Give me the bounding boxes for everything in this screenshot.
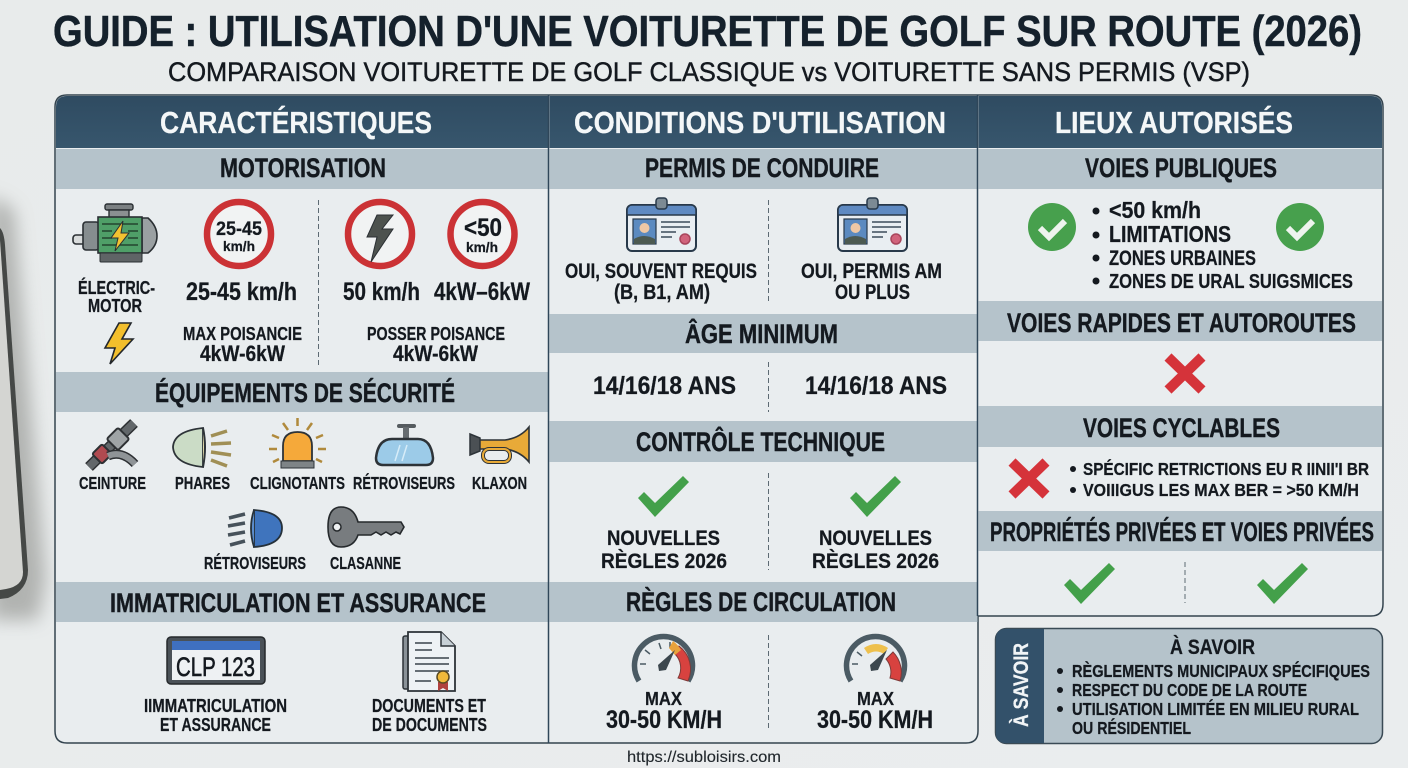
- icon: licence card right: [838, 198, 907, 251]
- text: permit right: OUI, PERMIS AM: [801, 260, 942, 283]
- icon: gauge left: [635, 636, 692, 681]
- section heading: voies publiques: [978, 149, 1382, 189]
- speed sign 25-45: 25-45: [216, 219, 262, 240]
- icon: licence card left: [627, 198, 696, 251]
- label: electric motor: ÉLECTRIC-: [78, 277, 155, 298]
- column header: [550, 96, 978, 148]
- values right: 50 km/h: [343, 278, 420, 306]
- text: nouvelles règles right: RÈGLES 2026: [812, 550, 939, 573]
- section heading: immatriculation: IMMATRICULATION ET ASSURANCE: [110, 588, 486, 618]
- section heading: voies publiques: VOIES PUBLIQUES: [1085, 153, 1277, 183]
- section heading: voies rapides: [978, 301, 1382, 341]
- icon: headlight: [173, 428, 231, 467]
- callout list: UTILISATION LIMITÉE EN MILIEU RURAL: [1072, 698, 1359, 719]
- text: permit left: [565, 260, 757, 304]
- callout list: [1057, 660, 1370, 738]
- icon: check private left: [1064, 563, 1115, 604]
- panel: lieux autorisés: [978, 96, 1382, 604]
- text: permit left: (B, B1, AM): [614, 281, 710, 304]
- section heading: motorisation: MOTORISATION: [220, 153, 386, 183]
- text: nouvelles règles right: [812, 527, 939, 573]
- section heading: âge minimum: ÂGE MINIMUM: [685, 318, 838, 349]
- column header: LIEUX AUTORISÉS: [1055, 105, 1293, 140]
- divider: [768, 473, 770, 570]
- icon: warning beacon: [269, 418, 326, 468]
- tablet at left edge: [0, 195, 46, 620]
- equipment labels row 1: RÉTROVISEURS: [353, 472, 455, 493]
- section heading: voies cyclables: VOIES CYCLABLES: [1083, 413, 1280, 443]
- section heading: âge minimum: [550, 314, 978, 353]
- sign: under 50: [450, 202, 514, 266]
- sign: electric bolt: [348, 202, 412, 266]
- panel: conditions d'utilisation: [550, 96, 978, 734]
- equipment labels row 2: RÉTROVISEURS: [204, 552, 306, 573]
- text: permit left: OUI, SOUVENT REQUIS: [565, 260, 757, 283]
- label: immatriculation: [144, 696, 287, 735]
- divider: [768, 200, 770, 302]
- power label right: 4kW-6kW: [393, 341, 478, 366]
- divider: [768, 635, 770, 728]
- label: documents: DE DOCUMENTS: [372, 715, 487, 735]
- power label right: POSSER POISANCE: [367, 324, 505, 344]
- age values: 14/16/18 ANS: [805, 372, 947, 400]
- label: immatriculation: IIMMATRICULATION: [144, 696, 287, 716]
- icon: blue headlight: [228, 510, 282, 547]
- text: nouvelles règles left: [601, 527, 727, 573]
- section heading: propriétés privées: [978, 511, 1382, 551]
- icon: seat belt: [89, 423, 135, 467]
- column divider: [548, 95, 978, 743]
- list: voies cyclables: VOIIIGUS LES MAX BER = >50 KM/H: [1083, 480, 1359, 500]
- equipment labels row 1: PHARES: [175, 473, 230, 493]
- list: voies publiques: <50 km/h: [1109, 197, 1201, 223]
- list: voies publiques: LIMITATIONS: [1109, 221, 1231, 247]
- section heading: équipements: ÉQUIPEMENTS DE SÉCURITÉ: [155, 377, 455, 408]
- list: voies publiques: [1092, 197, 1353, 293]
- label: immatriculation: ET ASSURANCE: [160, 715, 271, 735]
- label: max speed right: [817, 689, 933, 734]
- callout: à savoir: [996, 628, 1382, 744]
- label: max speed right: 30-50 KM/H: [817, 706, 933, 734]
- icon: check badge left: [1028, 203, 1076, 251]
- list: voies publiques: ZONES DE URAL SUIGSMICES: [1109, 271, 1353, 293]
- section heading: contrôle technique: [550, 421, 978, 462]
- icon: document: [403, 632, 455, 691]
- equipment labels row 2: [204, 552, 401, 573]
- equipment labels row 1: CLIGNOTANTS: [250, 473, 345, 493]
- text: nouvelles règles left: NOUVELLES: [607, 527, 720, 550]
- power label left: [183, 324, 302, 366]
- column header: CARACTÉRISTIQUES: [160, 105, 432, 140]
- speed sign 25-45: [207, 202, 271, 266]
- equipment labels row 1: [79, 472, 527, 493]
- callout list: OU RÉSIDENTIEL: [1072, 717, 1191, 738]
- text: permit right: [801, 260, 942, 304]
- column header: [978, 96, 1382, 148]
- sign: under 50: km/h: [466, 239, 498, 255]
- column header: CONDITIONS D'UTILISATION: [574, 105, 946, 140]
- equipment labels row 2: CLASANNE: [330, 553, 401, 573]
- label: max speed left: MAX: [645, 689, 682, 709]
- values right: [343, 278, 530, 306]
- divider: [1184, 562, 1186, 603]
- section heading: règles de circulation: RÈGLES DE CIRCULATION: [626, 586, 896, 617]
- icon: red cross: [1168, 357, 1202, 390]
- icon: check right: [850, 476, 901, 517]
- value: 25-45 km/h: 25-45 km/h: [186, 278, 297, 306]
- callout list: RESPECT DU CODE DE LA ROUTE: [1072, 680, 1307, 700]
- vertical tab label: À SAVOIR: [1010, 643, 1033, 727]
- list: voies cyclables: [1070, 458, 1369, 500]
- speed sign 25-45: km/h: [223, 238, 255, 254]
- column header: [56, 96, 548, 148]
- icon: gauge right: [846, 636, 905, 681]
- section heading: permis: PERMIS DE CONDUIRE: [645, 153, 879, 183]
- label: max speed left: [606, 689, 722, 734]
- section heading: équipements: [56, 372, 548, 412]
- section heading: motorisation: [56, 149, 548, 189]
- icon: key: [328, 507, 404, 547]
- age values: 14/16/18 ANS: [593, 372, 736, 400]
- age values: [593, 362, 947, 412]
- list: voies cyclables: SPÉCIFIC RETRICTIONS EU R IINII'I BR: [1083, 458, 1369, 479]
- divider: [318, 200, 320, 367]
- values right: 4kW–6kW: [434, 278, 530, 306]
- label: documents: [372, 696, 487, 735]
- section heading: voies cyclables: [978, 406, 1382, 447]
- label: electric motor: [78, 277, 155, 316]
- source url: https://subloisirs.com: [627, 749, 781, 766]
- text: nouvelles règles left: RÈGLES 2026: [601, 550, 727, 573]
- callout heading: À SAVOIR: [1170, 636, 1255, 659]
- icon: check badge right: [1276, 203, 1324, 251]
- icon: check private right: [1257, 563, 1308, 604]
- section heading: immatriculation: [56, 582, 548, 622]
- main table frame: [55, 95, 1383, 743]
- text: nouvelles règles right: NOUVELLES: [819, 527, 932, 550]
- sign: under 50: <50: [464, 214, 502, 242]
- icon: horn: [470, 427, 529, 462]
- equipment labels row 1: CEINTURE: [79, 473, 146, 493]
- icon: yellow bolt: [105, 323, 133, 364]
- list: voies publiques: ZONES URBAINES: [1109, 247, 1256, 270]
- icon: rear-view mirror: [376, 424, 433, 465]
- label: documents: DOCUMENTS ET: [372, 696, 486, 716]
- power label left: MAX POISANCIE: [183, 324, 302, 344]
- power label left: 4kW-6kW: [200, 341, 285, 366]
- section heading: contrôle technique: CONTRÔLE TECHNIQUE: [636, 426, 885, 457]
- text: permit right: OU PLUS: [835, 281, 910, 304]
- equipment labels row 1: KLAXON: [472, 473, 527, 493]
- section heading: permis: [550, 149, 978, 189]
- icon: licence plate: CLP 123: [176, 652, 255, 682]
- label: max speed right: MAX: [857, 689, 894, 709]
- icon: red cross cycle lanes: [1012, 462, 1046, 495]
- icon: licence plate: [167, 637, 265, 684]
- subtitle: COMPARAISON VOITURETTE DE GOLF CLASSIQUE vs VOITURETTE SANS PERMIS (VSP): [168, 57, 1250, 87]
- icon: check left: [638, 476, 689, 517]
- icon: electric motor: [73, 204, 157, 262]
- panel: caractéristiques: [56, 96, 548, 735]
- label: max speed left: 30-50 KM/H: [606, 706, 722, 734]
- power label right: [367, 324, 505, 366]
- label: electric motor: MOTOR: [88, 296, 142, 316]
- section heading: règles de circulation: [550, 582, 978, 622]
